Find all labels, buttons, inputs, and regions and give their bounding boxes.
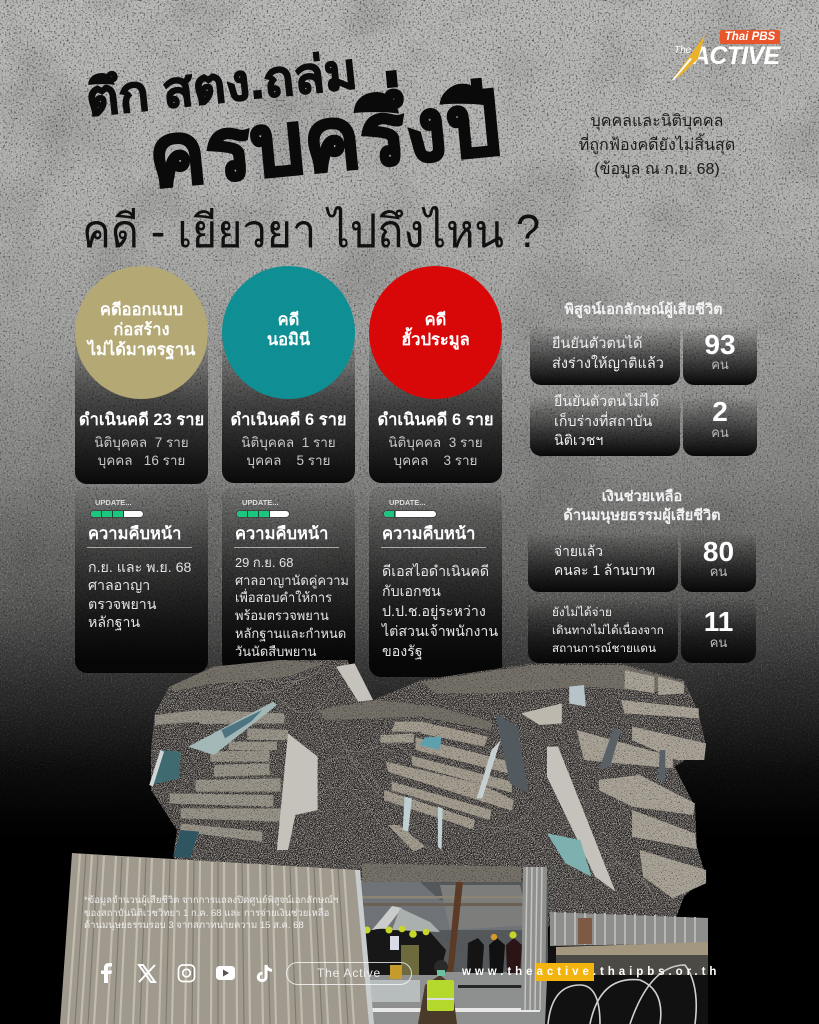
body text: [88, 560, 191, 631]
concrete background texture: [0, 0, 819, 786]
title line 3: คดี - เยียวยา ไปถึงไหน ?: [82, 205, 540, 257]
body text: [381, 563, 498, 660]
body text: วันนัดสืบพยาน: [235, 644, 316, 659]
subtitle: ที่ถูกฟ้องคดียังไม่สิ้นสุด: [579, 137, 735, 154]
panel: paid: [528, 534, 678, 592]
subtitle: บุคคลและนิติบุคคล: [591, 113, 723, 130]
label: ยืนยันตัวตนไม่ได้: [554, 394, 659, 410]
heading: identification: พิสูจน์เอกลักษณ์ผู้เสียชีวิต: [564, 302, 723, 318]
breakdown: นิติบุคคล 1 ราย: [241, 435, 336, 450]
circle heading: [369, 266, 502, 399]
body text: ไต่สวนเจ้าพนักงาน: [382, 624, 498, 640]
number: 11: [704, 606, 733, 637]
panel: case 2 summary: [222, 266, 355, 483]
breakdown: นิติบุคคล 7 ราย: [94, 435, 189, 450]
body text: ตรวจพยาน: [88, 597, 156, 613]
heading: ความคืบหน้า: [88, 525, 181, 543]
body text: ก.ย. และ พ.ย. 68: [88, 560, 191, 576]
title line 2: ครบครึ่งปี: [143, 62, 504, 206]
breakdown: บุคคล 3 ราย: [394, 453, 477, 468]
panel: progress 3: [369, 487, 502, 677]
website url: active: [537, 966, 593, 978]
icon: facebook: [101, 963, 112, 983]
breakdown: บุคคล 16 ราย: [98, 453, 185, 468]
website url: www.the .thaipbs.or.th: [462, 966, 720, 978]
label: [552, 606, 664, 655]
label: ยืนยันตัวตนได้: [552, 336, 642, 352]
progress bar: [90, 510, 144, 518]
panel: not paid count: [681, 600, 756, 663]
photo: collapsed building rubble: [60, 660, 708, 1024]
heading: compensation: เงินช่วยเหลือ: [602, 489, 682, 505]
card background: [222, 326, 355, 483]
panel: progress 1: [75, 487, 208, 673]
breakdown: [94, 435, 189, 468]
body text: หลักฐาน: [88, 615, 140, 631]
body text: พร้อมตรวจพยาน: [235, 608, 329, 623]
concrete columns: [277, 663, 615, 892]
number: 80: [703, 536, 734, 567]
panel: case 3 summary: [369, 266, 502, 483]
back fence and wall: [545, 912, 708, 1024]
channel pill: [286, 962, 412, 985]
icon: youtube: [216, 966, 235, 980]
body text: หลักฐานและกำหนด: [235, 626, 346, 641]
case count: ดำเนินคดี 6 ราย: [377, 411, 494, 429]
panel: not paid: [528, 600, 678, 663]
rebar tangle: [214, 667, 658, 903]
label: [554, 393, 659, 449]
update label: UPDATE...: [242, 498, 279, 507]
middle corrugated fence: [521, 867, 547, 1010]
label: นิติเวชฯ: [554, 433, 603, 449]
logo: The Active Thai PBS: The: [674, 45, 691, 56]
heading: ความคืบหน้า: [235, 525, 328, 543]
unit: คน: [710, 564, 727, 579]
circle heading: ฮั้วประมูล: [401, 331, 470, 349]
subtitle: (ข้อมูล ณ ก.ย. 68): [594, 161, 720, 178]
icon: tiktok: [258, 965, 272, 981]
panel: unidentified: [530, 398, 680, 456]
rubble mass: [151, 660, 706, 927]
breakdown: บุคคล 5 ราย: [247, 453, 330, 468]
card background: [75, 326, 208, 484]
icon: instagram: [178, 965, 194, 982]
logo: The Active Thai PBS: [672, 30, 781, 80]
panel: progress 2: [222, 487, 355, 673]
body text: ดีเอสไอดำเนินคดี: [382, 564, 489, 580]
circle heading: คดี: [278, 311, 299, 329]
unit: คน: [710, 635, 727, 650]
footnote: [84, 894, 338, 931]
label: [552, 335, 664, 372]
divider: [87, 547, 192, 548]
logo: The Active Thai PBS: ACTIVE: [692, 42, 779, 70]
panel: paid count: [681, 534, 756, 592]
update label: UPDATE...: [95, 498, 132, 507]
unit: คน: [711, 357, 729, 372]
heading: compensation: [563, 488, 721, 524]
footnote: ด้านมนุษยธรรมรอบ 3 จากสภาทนายความ 15 ส.ค. 68: [84, 920, 304, 931]
body text: เพื่อสอบคำให้การ: [235, 590, 332, 605]
circle heading: ไม่ได้มาตรฐาน: [88, 341, 195, 359]
label: เก็บร่างที่สถาบัน: [554, 414, 652, 430]
title block: [82, 43, 540, 257]
website url: [462, 963, 720, 981]
icon: X: [139, 965, 155, 982]
breakdown: นิติบุคคล 3 ราย: [388, 435, 483, 450]
left corrugated fence: [60, 853, 374, 1024]
number: 93: [704, 329, 736, 360]
breakdown: [241, 435, 336, 468]
debris behind rescuers: [358, 882, 548, 1024]
body text: ศาลอาญานัดคู่ความ: [235, 573, 349, 588]
update label: UPDATE...: [389, 498, 426, 507]
glass and steel pieces: [149, 702, 665, 877]
subtitle: [579, 113, 735, 178]
panel: identified count: [683, 327, 757, 385]
footnote: ของสถาบันนิติเวชวิทยา 1 ก.ค. 68 และ การจ่ายเงินช่วยเหลือ: [84, 908, 329, 919]
unit: คน: [711, 425, 729, 440]
panel: unidentified count: [683, 398, 757, 456]
progress bar: [236, 510, 290, 518]
circle heading: ก่อสร้าง: [113, 321, 170, 339]
divider: [381, 547, 486, 548]
panel: identified: [530, 327, 680, 385]
body text: ของรัฐ: [382, 644, 423, 660]
label: ส่งร่างให้ญาติแล้ว: [552, 356, 664, 372]
label: ยังไม่ได้จ่าย: [552, 606, 612, 619]
label: [554, 544, 655, 578]
footnote: *ข้อมูลจำนวนผู้เสียชีวิต จากการแถลงปิดศูนย์พิสูจน์เอกลักษณ์ฯ: [84, 895, 338, 906]
social icons: [101, 963, 272, 983]
divider: [234, 547, 339, 548]
heading: compensation: ด้านมนุษยธรรมผู้เสียชีวิต: [563, 508, 721, 524]
circle heading: [222, 266, 355, 399]
rescue scene backdrop: [358, 882, 548, 1024]
body text: 29 ก.ย. 68: [235, 555, 293, 570]
body text: [235, 555, 349, 659]
rescue workers: [362, 926, 522, 979]
breakdown: [388, 435, 483, 468]
case count: ดำเนินคดี 6 ราย: [230, 411, 347, 429]
label: คนละ 1 ล้านบาท: [554, 563, 655, 578]
title line 1: ตึก สตง.ถล่ม: [83, 43, 360, 127]
label: จ่ายแล้ว: [554, 544, 603, 559]
channel pill: The Active: [317, 966, 381, 980]
number: 2: [712, 396, 728, 427]
body text: ศาลอาญา: [88, 578, 150, 594]
progress bar: [383, 510, 437, 518]
logo: The Active Thai PBS: Thai PBS: [725, 31, 775, 43]
card background: [369, 326, 502, 483]
foreground worker with vest: [418, 960, 457, 1024]
body text: กับเอกชน: [382, 584, 441, 600]
circle heading: นอมินี: [267, 331, 310, 349]
panel: case 1 summary: [75, 266, 208, 484]
body text: ป.ป.ช.อยู่ระหว่าง: [382, 604, 486, 620]
circle heading: [75, 266, 208, 399]
case count: ดำเนินคดี 23 ราย: [79, 411, 204, 429]
label: สถานการณ์ชายแดน: [552, 642, 656, 655]
label: เดินทางไม่ได้เนื่องจาก: [552, 624, 664, 637]
heading: ความคืบหน้า: [382, 525, 475, 543]
circle heading: คดี: [425, 311, 446, 329]
circle heading: คดีออกแบบ: [100, 301, 183, 319]
